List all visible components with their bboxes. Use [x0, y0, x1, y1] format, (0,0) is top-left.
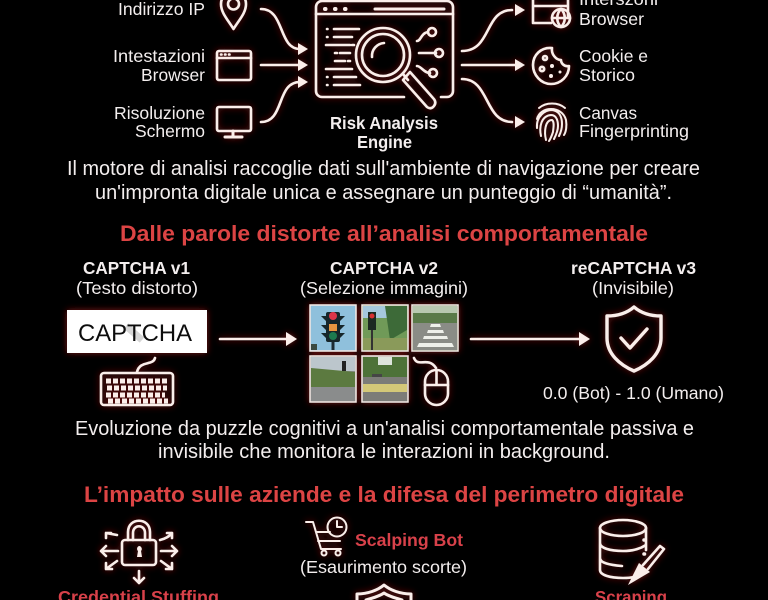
- column titles: CAPTCHA v1: [83, 258, 190, 278]
- icon: browser with globe: [533, 0, 570, 27]
- column titles: [76, 258, 696, 298]
- label: scalping bot: Scalping Bot: [355, 530, 463, 550]
- tile: crosswalk: [412, 305, 458, 351]
- right output labels: Cookie e: [579, 46, 648, 66]
- description: evolution: Evoluzione da puzzle cognitivi a un'analisi comportamentale passiva e: [75, 417, 694, 440]
- icon: cart with clock: [306, 518, 346, 556]
- column titles: (Testo distorto): [76, 278, 198, 298]
- engine label: [330, 113, 438, 152]
- left input labels: Schermo: [135, 121, 205, 141]
- icon: mouse: [414, 358, 448, 405]
- left input labels: Risoluzione: [114, 103, 205, 123]
- description: evolution: [75, 417, 694, 463]
- output arrows: [462, 4, 525, 128]
- right output labels: Browser: [579, 9, 644, 29]
- icon: risk analysis engine window with magnifier: [316, 1, 453, 108]
- image grid: [310, 305, 458, 402]
- icon: location pin: [221, 0, 246, 29]
- column titles: reCAPTCHA v3: [571, 258, 696, 278]
- icon: shield with check: [607, 307, 661, 371]
- icon: fingerprint: [537, 104, 566, 141]
- left input labels: Browser: [141, 65, 205, 85]
- column titles: (Selezione immagini): [300, 278, 468, 298]
- right output labels: Canvas: [579, 103, 637, 123]
- icon: keyboard: [101, 358, 173, 405]
- icon: database with scraper: [600, 520, 664, 585]
- distorted captcha box: CAPTCHA: [78, 320, 192, 347]
- column titles: (Invisibile): [592, 278, 674, 298]
- arrow: v2 to v3: [471, 332, 590, 346]
- engine label: Engine: [357, 132, 412, 152]
- tile: traffic light on road: [362, 305, 408, 351]
- left input labels: Intestazioni: [113, 46, 205, 66]
- right output labels: Storico: [579, 65, 635, 85]
- description: evolution: invisibile che monitora le interazioni in background.: [158, 440, 610, 463]
- heading: impact: L’impatto sulle aziende e la difesa del perimetro digitale: [84, 482, 684, 507]
- icon: cookie: [533, 48, 569, 84]
- distorted captcha box: [67, 310, 207, 353]
- icon: lock with arrows: [101, 521, 177, 583]
- heading: evolution: Dalle parole distorte all’analisi comportamentale: [120, 221, 648, 246]
- icon: browser window: [217, 51, 251, 80]
- label: scalping bot: [300, 530, 467, 577]
- tile: road with signal: [310, 356, 356, 402]
- icon: bottom shield: [357, 585, 411, 600]
- left input labels: [113, 0, 205, 141]
- tile: traffic light on sky: [310, 305, 356, 351]
- right output labels: Fingerprinting: [579, 121, 689, 141]
- tile: road crossing: [362, 356, 408, 402]
- description: engine: Il motore di analisi raccoglie dati sull'ambiente di navigazione per creare: [67, 157, 700, 180]
- label: scalping bot: (Esaurimento scorte): [300, 557, 467, 577]
- description: engine: [67, 157, 700, 204]
- description: engine: un'impronta digitale unica e assegnare un punteggio di “umanità”.: [95, 181, 672, 204]
- engine label: Risk Analysis: [330, 113, 438, 133]
- column titles: CAPTCHA v2: [330, 258, 438, 278]
- right output labels: [579, 0, 689, 141]
- score label: 0.0 (Bot) - 1.0 (Umano): [543, 383, 724, 403]
- icon: monitor: [217, 107, 251, 137]
- input arrows: [261, 9, 308, 122]
- arrow: v1 to v2: [220, 332, 297, 346]
